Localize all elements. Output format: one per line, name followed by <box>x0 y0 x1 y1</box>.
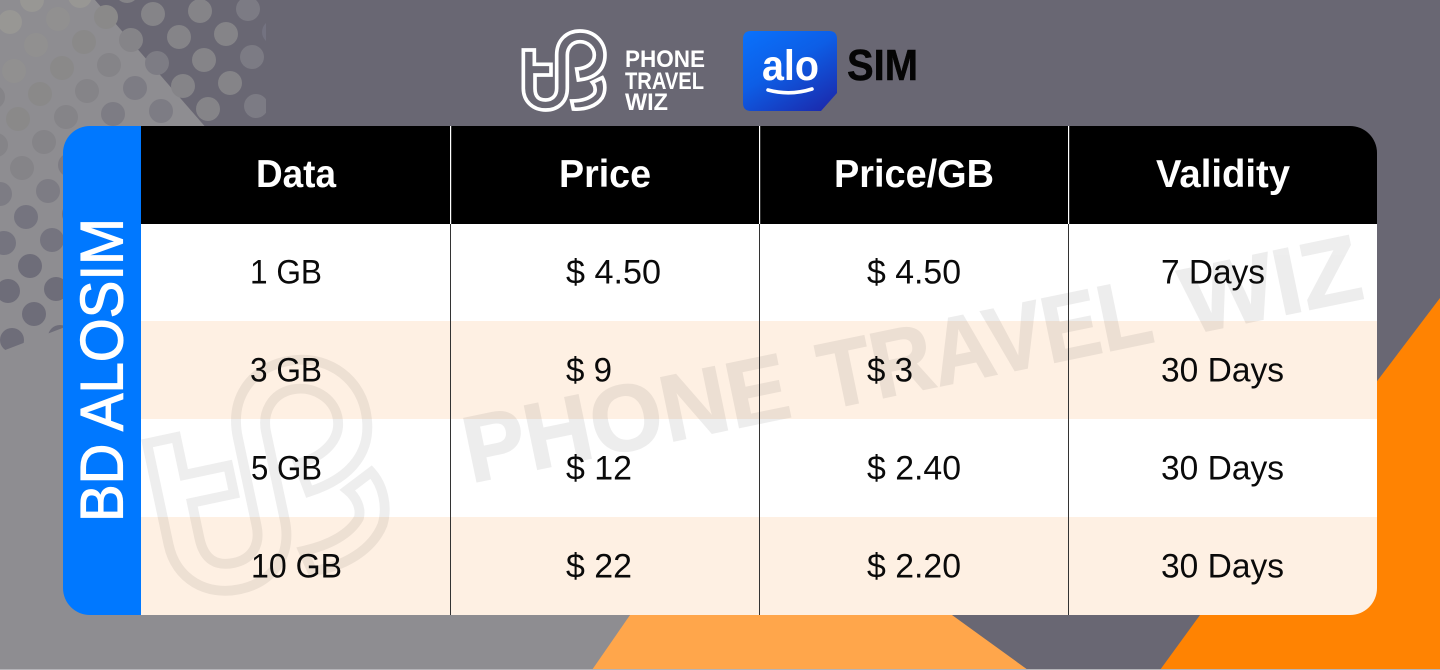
row: 10 GB: $ 2.20 <box>867 548 961 586</box>
row: 10 GB <box>251 548 1284 586</box>
row: 1 GB: $ 4.50 <box>867 254 961 292</box>
table heading labels: Price/GB <box>834 153 994 196</box>
logo: alo SIM <box>743 31 918 111</box>
wordmark: PHONE <box>625 46 705 73</box>
row: 1 GB <box>250 254 1265 292</box>
row: 3 GB: 3 GB <box>250 352 322 390</box>
row: 3 GB: $ 3 <box>867 352 913 390</box>
background: orange shape <box>1160 298 1440 670</box>
icon: alo sim card <box>743 31 837 111</box>
row: 5 GB <box>251 450 1284 488</box>
table heading labels: Validity <box>1156 153 1290 196</box>
sidebar <box>63 126 141 615</box>
row: 5 GB: 30 Days <box>1161 450 1284 488</box>
table heading labels: Data <box>256 153 336 196</box>
watermark: brand text: TRAVEL <box>809 258 1161 429</box>
watermark: brand text: WIZ <box>1172 215 1370 354</box>
row: 10 GB: 30 Days <box>1161 548 1284 586</box>
watermark: tp monogram <box>136 347 396 602</box>
watermark: brand text: PHONE <box>454 333 798 503</box>
row: 5 GB: $ 12 <box>566 450 632 488</box>
row: 1 GB: $ 4.50 <box>566 254 661 292</box>
row: 5 GB: $ 2.40 <box>867 450 961 488</box>
watermark: brand text <box>463 234 1364 482</box>
row: 3 GB: $ 9 <box>566 352 612 390</box>
row: 3 GB <box>250 352 1284 390</box>
row: 1 GB: 1 GB <box>250 254 322 292</box>
row: 3 GB: 30 Days <box>1161 352 1284 390</box>
SIM label: SIM <box>847 41 918 90</box>
wordmark: TRAVEL <box>625 68 704 95</box>
icon: alo sim card: alo <box>762 42 819 90</box>
table rows <box>141 224 1377 615</box>
wordmark <box>625 46 705 116</box>
icon: tp monogram <box>523 31 605 110</box>
background: halftone dots <box>0 0 286 352</box>
wordmark: WIZ <box>625 89 668 116</box>
logo: Phone Travel Wiz <box>523 31 705 116</box>
table header bar <box>141 126 1377 224</box>
row: 1 GB: 7 Days <box>1161 254 1265 292</box>
row: 10 GB: 10 GB <box>251 548 342 586</box>
sidebar: BD ALOSIM <box>68 218 136 522</box>
row: 5 GB: 5 GB <box>251 450 322 488</box>
background: light orange shape <box>592 615 1028 670</box>
panel: pricing table <box>63 126 1377 615</box>
table heading labels: Price <box>559 153 651 196</box>
row: 10 GB: $ 22 <box>566 548 632 586</box>
column dividers <box>450 126 1069 615</box>
table heading labels <box>256 153 1290 196</box>
